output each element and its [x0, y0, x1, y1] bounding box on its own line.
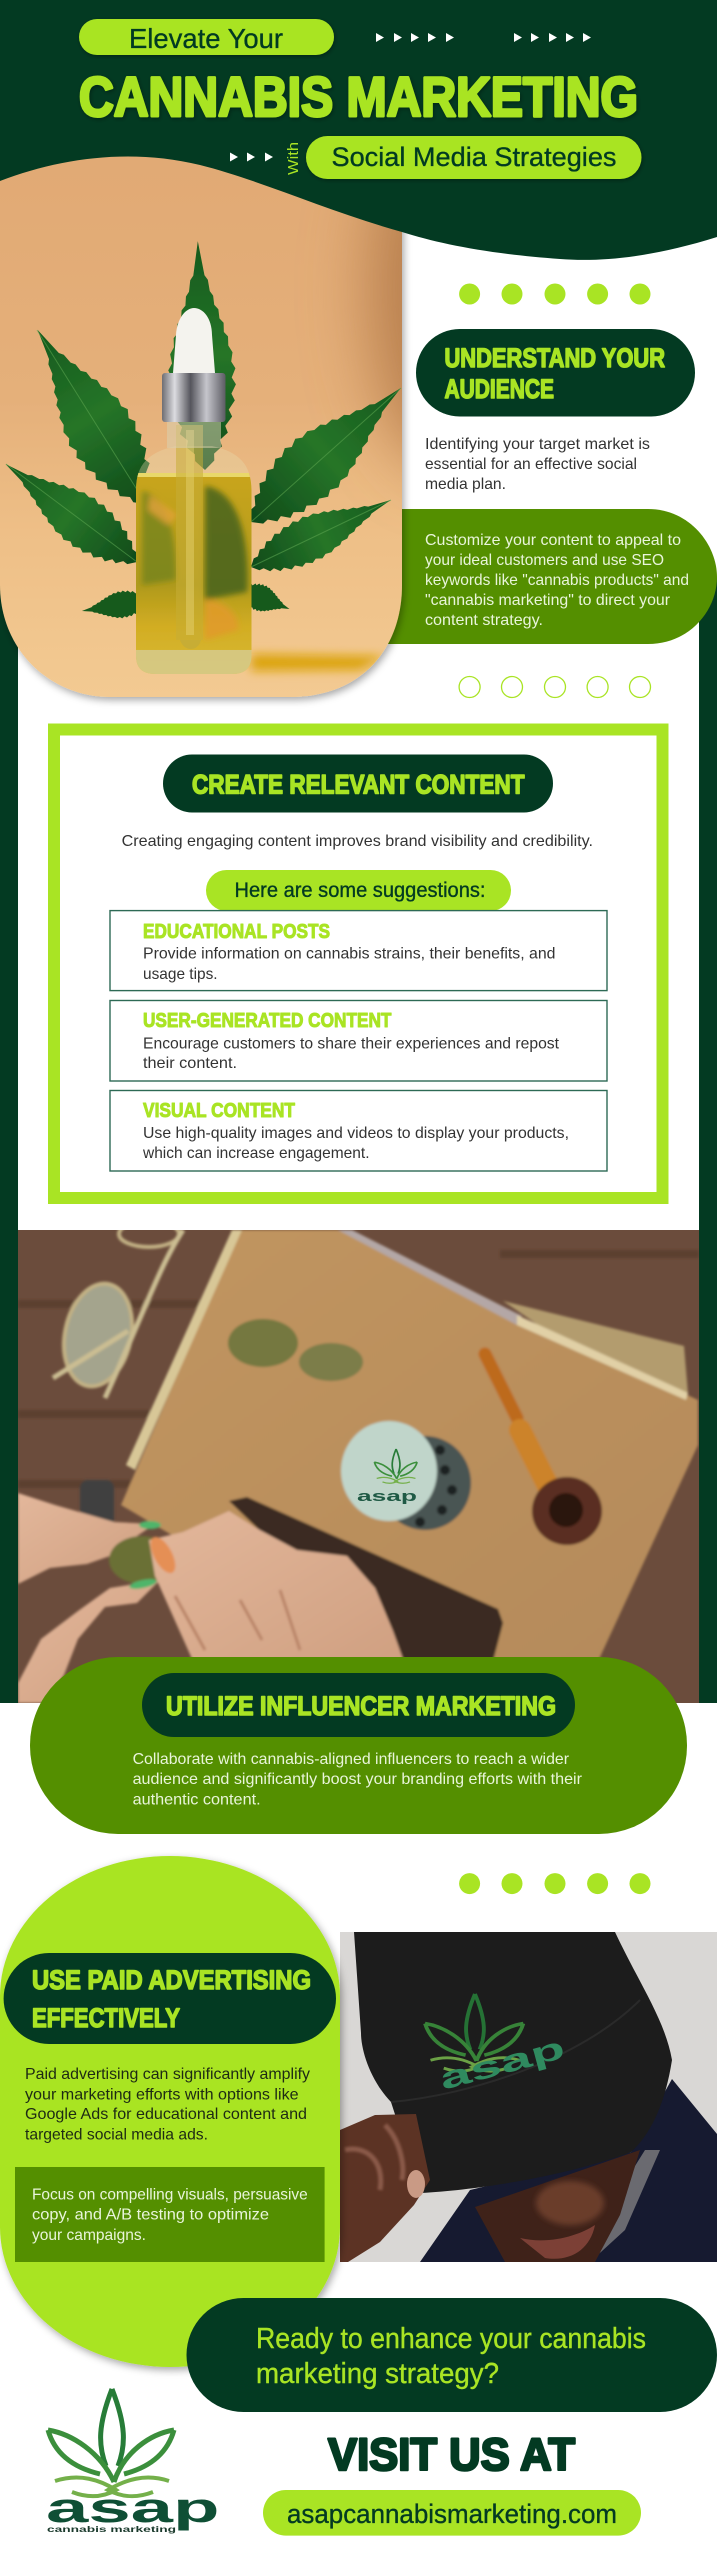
logo: asap cannabis marketing: cannabis marketing — [47, 2525, 176, 2534]
logo on grinder — [357, 1449, 417, 1505]
card: visual content: VISUAL CONTENT — [143, 1100, 295, 1122]
panel: create relevant content — [54, 730, 662, 1198]
icon: arrows top — [376, 33, 591, 42]
pill: elevate your: Elevate Your — [129, 23, 283, 54]
pill: website — [263, 2490, 641, 2536]
callout: ready to enhance — [186, 2298, 717, 2412]
heading: create relevant content: CREATE RELEVANT CONTENT — [192, 770, 524, 800]
pill: social media strategies: Social Media Strategies — [332, 142, 616, 172]
heading: understand your audience: UNDERSTAND YOUR — [444, 343, 665, 373]
text: paid advertising: targeted social media ads. — [25, 2126, 208, 2143]
text: intro: Creating engaging content improves brand visibility and credibility. — [122, 833, 593, 850]
logo on grinder: asap — [357, 1488, 417, 1505]
heading: understand your audience — [416, 329, 695, 416]
card: visual content: which can increase engagement. — [142, 1145, 370, 1162]
panel: compelling visuals: Focus on compelling visuals, persuasive — [32, 2186, 308, 2204]
callout: ready to enhance: marketing strategy? — [256, 2358, 499, 2390]
heading: use paid advertising effectively — [4, 1953, 336, 2044]
card: educational posts: Provide information on cannabis strains, their benefits, and — [143, 946, 556, 962]
pill: social media strategies — [306, 136, 642, 179]
logo on cap — [425, 1994, 568, 2097]
card: visual content — [110, 1090, 607, 1171]
text: influencers: authentic content. — [133, 1792, 261, 1808]
panel: customize content: content strategy. — [425, 612, 543, 629]
text: identifying target market: essential for an effective social — [425, 456, 637, 473]
card: educational posts: usage tips. — [143, 966, 218, 983]
heading: visit us at: VISIT US AT — [328, 2429, 575, 2480]
panel: utilize influencer marketing — [30, 1657, 687, 1834]
panel: compelling visuals: your campaigns. — [32, 2227, 146, 2244]
text: influencers: audience and significantly boost your branding efforts with their — [133, 1771, 583, 1788]
dots filled — [459, 1873, 650, 1894]
logo: asap cannabis marketing: asap — [46, 2484, 220, 2531]
panel: compelling visuals: copy, and A/B testing to optimize — [32, 2207, 269, 2224]
card: visual content: Use high-quality images and videos to display your products, — [143, 1125, 569, 1142]
title: CANNABIS MARKETING — [79, 65, 638, 128]
photo: man in asap cap — [340, 1932, 717, 2262]
heading: utilize influencer marketing: UTILIZE INFLUENCER MARKETING — [166, 1691, 556, 1721]
text: identifying target market: Identifying your target market is — [425, 436, 650, 453]
icon: arrows subtitle — [230, 152, 273, 162]
card: user-generated content: their content. — [143, 1055, 237, 1072]
card: user-generated content: Encourage customers to share their experiences and repost — [143, 1035, 560, 1052]
card: user-generated content — [110, 1000, 607, 1081]
logo: asap cannabis marketing — [46, 2389, 220, 2534]
heading: understand your audience: AUDIENCE — [444, 374, 554, 404]
logo on cap: asap — [436, 2030, 568, 2097]
text: identifying target market — [425, 436, 650, 493]
heading: create relevant content — [163, 754, 553, 812]
card: educational posts — [110, 911, 607, 991]
panel: compelling visuals — [15, 2167, 325, 2262]
card: user-generated content: USER-GENERATED CONTENT — [143, 1010, 391, 1032]
text: identifying target market: media plan. — [425, 476, 506, 493]
pill: elevate your — [79, 19, 334, 55]
panel: customize content: keywords like "cannabis products" and — [425, 572, 689, 589]
heading: use paid advertising effectively: EFFECTIVELY — [32, 2003, 180, 2033]
text: paid advertising: Google Ads for educational content and — [25, 2106, 307, 2123]
label: with: With — [285, 142, 302, 175]
callout: ready to enhance: Ready to enhance your cannabis — [256, 2323, 646, 2355]
pill: suggestions: Here are some suggestions: — [234, 879, 486, 902]
dots filled — [459, 284, 650, 304]
text: influencers — [133, 1751, 583, 1808]
panel: customize content: your ideal customers and use SEO — [425, 552, 664, 569]
panel: customize content: Customize your content to appeal to — [425, 532, 681, 549]
pill: website: asapcannabismarketing.com — [287, 2499, 617, 2529]
photo: cannabis oil bottle with leaf — [0, 156, 409, 705]
panel: customize content — [380, 509, 717, 644]
panel: customize content: "cannabis marketing" to direct your — [425, 592, 671, 609]
pill: suggestions — [206, 870, 511, 911]
panel: use paid advertising — [0, 1856, 340, 2367]
header wave — [0, 0, 717, 260]
heading: use paid advertising effectively: USE PAID ADVERTISING — [32, 1965, 311, 1995]
text: paid advertising: your marketing efforts with options like — [25, 2086, 299, 2103]
text: paid advertising — [25, 2066, 310, 2143]
card: educational posts: EDUCATIONAL POSTS — [143, 921, 330, 943]
text: influencers: Collaborate with cannabis-aligned influencers to reach a wider — [133, 1751, 570, 1768]
photo: desk with grinder, pipe and hands — [18, 1221, 699, 1703]
dots outlined — [459, 676, 650, 698]
heading: utilize influencer marketing — [142, 1673, 575, 1737]
text: paid advertising: Paid advertising can significantly amplify — [25, 2066, 310, 2083]
